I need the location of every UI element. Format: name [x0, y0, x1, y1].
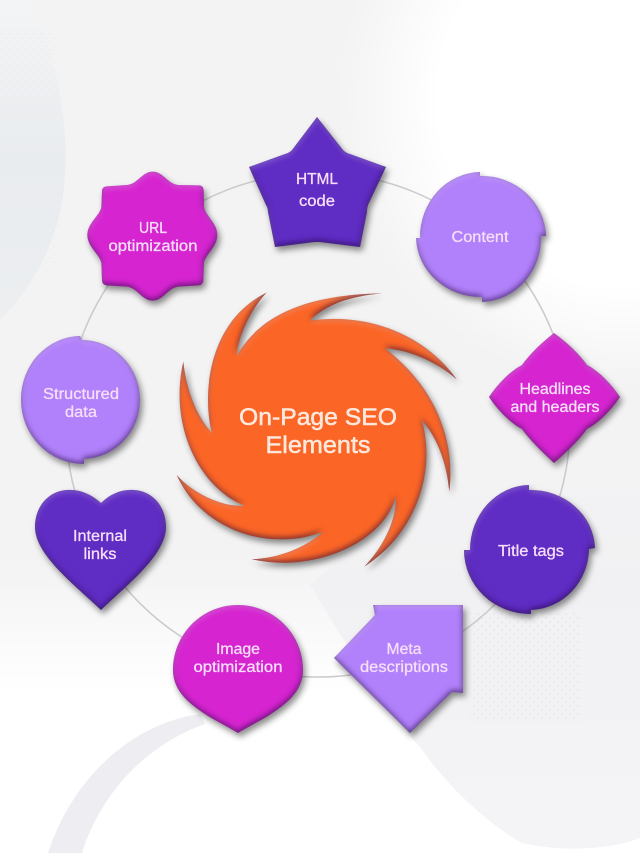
drop shape	[173, 605, 303, 733]
label: HTML	[296, 171, 338, 188]
label	[73, 528, 127, 563]
label: links	[84, 546, 117, 563]
label: Meta	[386, 641, 422, 658]
label: data	[65, 404, 97, 421]
label: optimization	[194, 659, 282, 676]
node: HTML code	[249, 117, 386, 247]
arrow house shape	[334, 605, 463, 733]
four-point shape	[489, 333, 620, 463]
label	[510, 381, 600, 416]
label: and headers	[510, 399, 600, 416]
central swirl: On-Page SEO Elements	[177, 293, 457, 567]
star shape	[249, 117, 386, 247]
notched circle shape	[416, 172, 546, 302]
label	[296, 171, 338, 210]
node: Internal links	[35, 490, 166, 610]
label: Internal	[73, 528, 127, 545]
label: descriptions	[360, 659, 448, 676]
label: URL	[139, 220, 167, 237]
swirl title: On-Page SEO	[239, 404, 397, 431]
label: Structured	[43, 386, 119, 403]
label: Content	[452, 229, 509, 246]
notched circle shape	[21, 336, 140, 464]
label: Title tags	[498, 543, 564, 560]
label	[360, 641, 448, 676]
swirl title	[239, 404, 397, 459]
scalloped shape	[87, 172, 217, 301]
node: Title tags	[464, 485, 595, 614]
label: Image	[216, 641, 260, 658]
label: Headlines	[520, 381, 591, 398]
label	[108, 220, 198, 255]
node: Image optimization	[173, 605, 303, 733]
node: Headlines and headers	[489, 333, 620, 463]
label: optimization	[108, 238, 198, 255]
notched circle shape	[464, 485, 595, 614]
label	[194, 641, 282, 676]
connecting ring	[66, 173, 570, 677]
node: URL optimization	[87, 172, 217, 301]
node: Structured data	[21, 336, 140, 464]
label: code	[299, 193, 335, 210]
label	[43, 386, 119, 421]
swirl title: Elements	[266, 432, 370, 459]
node: Meta descriptions	[334, 605, 463, 733]
swirl shape	[177, 293, 457, 567]
node: Content	[416, 172, 546, 302]
heart shape	[35, 490, 166, 610]
